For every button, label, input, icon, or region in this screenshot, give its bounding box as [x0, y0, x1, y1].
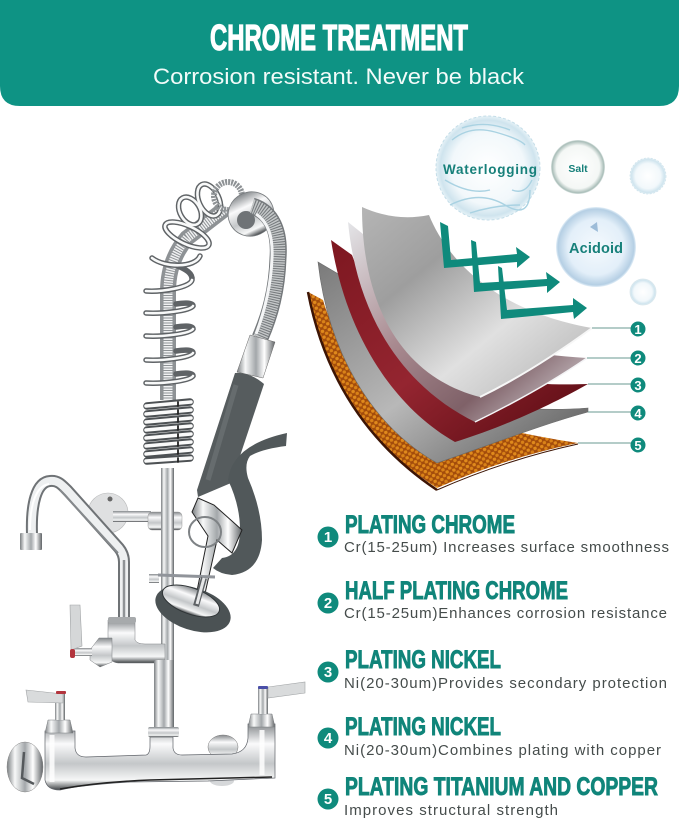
- item 1: PLATING CHROME: [345, 511, 515, 539]
- main wall-mount body: [45, 660, 275, 790]
- number badge 1: 1: [634, 322, 642, 337]
- arrow 2: [471, 240, 560, 293]
- bubble: small top right: [630, 158, 666, 194]
- item 2: [318, 577, 667, 622]
- left hot handle: [26, 690, 73, 733]
- layer 1: chrome: [362, 207, 592, 397]
- faucet illustration: [7, 180, 305, 792]
- wall flanges: [7, 735, 238, 792]
- item 1: Cr(15-25um) Increases surface smoothness: [344, 539, 669, 556]
- subtitle: Corrosion resistant. Never be black: [153, 64, 525, 89]
- number badge 3: 3: [634, 378, 642, 393]
- hose collar: [237, 335, 275, 378]
- arrow 3: [498, 266, 587, 319]
- item 1: 1: [324, 529, 332, 546]
- curved rubber hook: [213, 433, 287, 575]
- item 3: Ni(20-30um)Provides secondary protection: [344, 675, 667, 692]
- grip highlight: [208, 385, 236, 480]
- number badge 3: [630, 378, 646, 393]
- pre-rinse spring riser tube: [168, 208, 226, 400]
- item 4: [318, 713, 661, 759]
- item 2: HALF PLATING CHROME: [345, 577, 568, 605]
- item 2: Cr(15-25um)Enhances corrosion resistance: [344, 605, 667, 622]
- item 4: Ni(20-30um)Combines plating with copper: [344, 742, 661, 759]
- sprayer grip: [197, 373, 264, 497]
- item 5: Improves structural strength: [344, 802, 558, 819]
- number badge 1: [630, 322, 646, 337]
- item 4: PLATING NICKEL: [345, 713, 501, 741]
- spray valve assembly: [149, 498, 242, 598]
- item 5: 5: [324, 791, 332, 808]
- rigid riser rod: [161, 468, 174, 668]
- upper valve with handle: [70, 605, 165, 667]
- layer 3: nickel red: [331, 240, 588, 442]
- layer 2: half chrome: [348, 222, 587, 422]
- spout: [20, 481, 124, 620]
- number badge 2: [630, 350, 646, 366]
- wall bracket and arm: [88, 493, 182, 533]
- bubble: waterlogging: [436, 116, 540, 220]
- bubble: salt: Salt: [568, 163, 588, 175]
- bubble: acidoid: [556, 207, 636, 287]
- title: CHROME TREATMENT: [210, 17, 468, 58]
- number badge 4: 4: [634, 406, 642, 421]
- bubble: small lower: [630, 279, 656, 305]
- plating layers diagram: [308, 207, 646, 490]
- splash guard: [149, 577, 237, 641]
- bubbles: [436, 116, 666, 305]
- number badge 2: 2: [634, 351, 642, 366]
- riser tube highlight: [168, 208, 226, 400]
- item 3: [318, 646, 667, 692]
- item 4: 4: [324, 730, 333, 747]
- layer 5: titanium and copper: [308, 292, 578, 490]
- item 5: [318, 773, 658, 819]
- layer 4: nickel: [318, 262, 588, 463]
- number badge 4: [630, 406, 646, 421]
- item 3: 3: [324, 664, 332, 681]
- top coil mount ring: [214, 182, 281, 244]
- header banner: [0, 0, 679, 106]
- right cold handle: [248, 682, 305, 727]
- bubble: salt: [551, 140, 605, 194]
- number badge 5: [630, 438, 646, 453]
- arrow 1: [440, 222, 530, 268]
- bubble: acidoid: Acidoid: [569, 241, 623, 257]
- bubble: waterlogging: Waterlogging: [443, 162, 537, 177]
- layer leader lines: [578, 328, 632, 443]
- corrosion arrows: [440, 222, 587, 319]
- flexible hose: [252, 206, 278, 338]
- loose spring coils: [146, 180, 225, 383]
- item 3: PLATING NICKEL: [345, 646, 501, 674]
- number badge 5: 5: [634, 438, 642, 453]
- dense lower spring coil: [146, 402, 191, 462]
- layer descriptions: [318, 511, 669, 819]
- item 2: 2: [324, 595, 332, 612]
- item 1: [318, 511, 669, 556]
